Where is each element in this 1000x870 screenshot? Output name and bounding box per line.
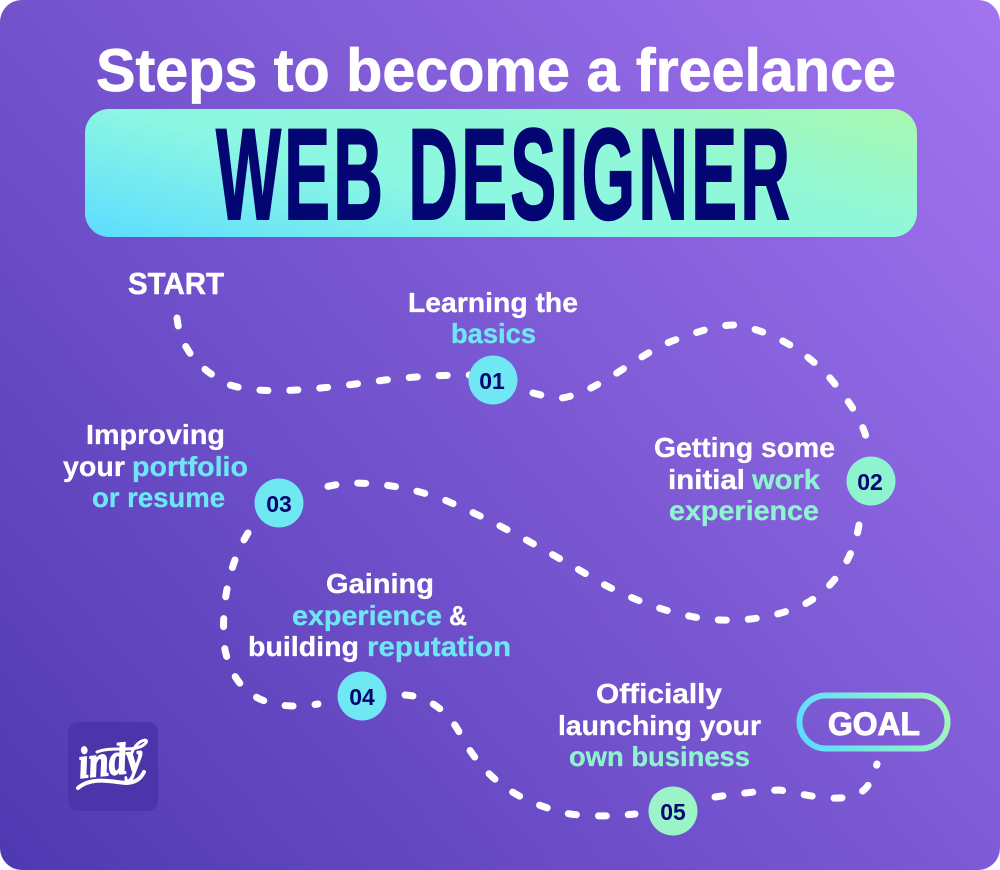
step 02 badge: [846, 456, 896, 506]
logo: indy: indy: [76, 732, 145, 788]
step 01 label: [408, 287, 578, 349]
dashed route path: [177, 318, 877, 816]
step 04 label: Gaining: [326, 568, 434, 599]
step 04 label: &: [449, 600, 467, 631]
step 04 badge: 04: [349, 684, 375, 710]
step 04 label: building: [248, 631, 359, 662]
step 01 badge: 01: [479, 368, 505, 394]
title: steps to become a freelance: Steps to become a freelance: [96, 37, 896, 104]
step 03: [63, 419, 304, 528]
step 03 label: or resume: [92, 482, 225, 513]
step 01 badge: [468, 356, 518, 404]
step 05 label: Officially: [596, 678, 722, 709]
title banner: [85, 103, 917, 248]
step 01 label: Learning the: [408, 287, 578, 318]
goal badge: GOAL: [828, 706, 920, 742]
step 01: [408, 287, 578, 404]
step 04 label: reputation: [367, 631, 511, 662]
step 03 label: Improving: [86, 419, 225, 450]
step 02 label: initial: [668, 464, 745, 495]
step 05 label: [558, 678, 761, 772]
step 05 badge: [648, 786, 698, 836]
step 02 label: Getting some: [654, 432, 835, 463]
step 03 label: your: [63, 451, 125, 482]
step 02: [654, 432, 896, 526]
step 04 badge: [338, 672, 386, 720]
step 05 label: launching your: [558, 710, 761, 741]
step 02 label: [654, 432, 835, 526]
step 03 label: portfolio: [132, 451, 248, 482]
step 02 label: work: [751, 464, 820, 495]
banner text: web designer: WEB DESIGNER: [216, 103, 790, 248]
step 03 label: [63, 419, 248, 513]
step 03 badge: 03: [266, 491, 292, 517]
step 04 label: experience: [292, 600, 442, 631]
step 05 label: own business: [569, 741, 750, 772]
goal badge: [800, 696, 948, 748]
step 05 badge: 05: [660, 799, 686, 825]
step 01 label: basics: [451, 318, 536, 349]
step 04 label: [248, 568, 511, 662]
step 04: [248, 568, 511, 720]
step 02 badge: 02: [857, 469, 883, 495]
step 03 badge: [254, 478, 304, 528]
logo: indy: [68, 722, 158, 811]
start label: START: [128, 266, 224, 301]
step 02 label: experience: [669, 495, 819, 526]
step 05: [558, 678, 761, 836]
